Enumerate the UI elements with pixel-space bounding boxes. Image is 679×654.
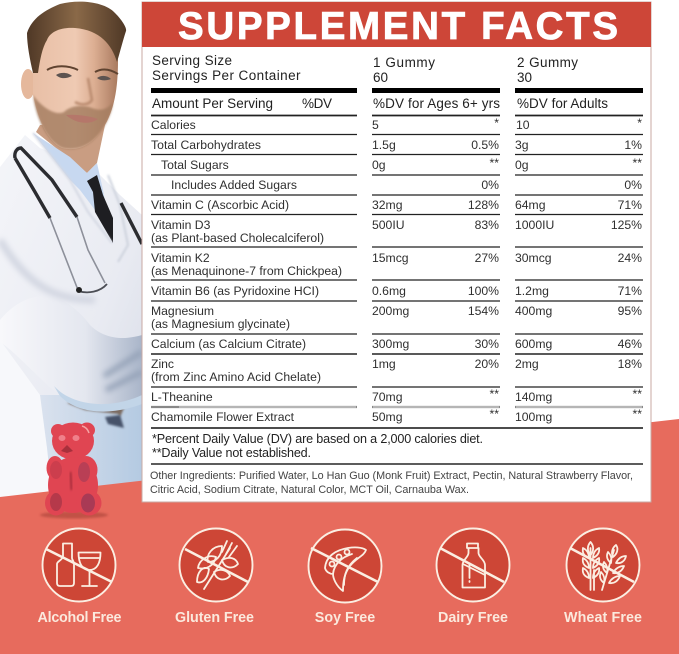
table row: total sugars: **: [632, 156, 642, 170]
table row: vitamin k2: 27%: [475, 251, 499, 265]
table row: zinc: Zinc: [151, 357, 174, 371]
ear: [21, 69, 35, 99]
table row: zinc: (from Zinc Amino Acid Chelate): [151, 370, 321, 384]
table row: l-theanine: **: [632, 387, 642, 401]
lower shirt area: [40, 395, 142, 490]
table row: calories: Calories: [151, 118, 196, 132]
table row: vitamin b6: 1.2mg: [515, 284, 549, 298]
thick rules: [151, 88, 643, 93]
table row: chamomile: 50mg: [372, 410, 402, 424]
column headings: Amount Per Serving: [152, 96, 273, 111]
column headings: %DV for Adults: [517, 96, 608, 111]
table row: vitamin b6: 71%: [618, 284, 642, 298]
serving header: 1 Gummy: [373, 55, 435, 70]
table row: magnesium: 154%: [468, 304, 499, 318]
eyes and brows: [47, 66, 118, 74]
nose and mouth: [75, 78, 92, 104]
column headings: [152, 96, 608, 111]
serving header: [152, 53, 578, 85]
column headings: %DV for Ages 6+ yrs: [373, 96, 500, 111]
title: SUPPLEMENT FACTS: [178, 5, 618, 48]
belt shadow: [67, 395, 130, 417]
table row: calcium: 600mg: [515, 337, 552, 351]
table row: vitamin d3: (as Plant-based Cholecalciferol): [151, 231, 324, 245]
face: [33, 26, 118, 149]
icon: gluten free: [180, 528, 252, 602]
table row: magnesium: 400mg: [515, 304, 552, 318]
table row: chamomile: Chamomile Flower Extract: [151, 410, 295, 424]
table row: zinc: 2mg: [515, 357, 539, 371]
necktie: [87, 175, 113, 243]
table row: magnesium: 200mg: [372, 304, 409, 318]
other ingredients: Other Ingredients: Purified Water, Lo Han Guo (Monk Fruit) Extract, Pectin, Natural Strawberry Flavor,: [150, 470, 633, 482]
table row: vitamin b6: 0.6mg: [372, 284, 406, 298]
table row: total carbohydrates: 1%: [624, 138, 642, 152]
table row: vitamin k2: 15mcg: [372, 251, 409, 265]
table row: magnesium: (as Magnesium glycinate): [151, 317, 290, 331]
table row: calories: *: [494, 116, 499, 130]
serving header: 30: [517, 70, 532, 85]
other ingredients: [150, 470, 633, 496]
table row: chamomile: **: [490, 407, 499, 421]
table row: vitamin k2: 30mcg: [515, 251, 552, 265]
title banner: [142, 2, 651, 47]
coat lapel shading: [33, 133, 112, 243]
table row: calcium: 300mg: [372, 337, 409, 351]
table row: total carbohydrates: 1.5g: [372, 138, 396, 152]
table row: total carbohydrates: 3g: [515, 138, 529, 152]
table row: vitamin c: Vitamin C (Ascorbic Acid): [151, 198, 289, 212]
table row: added sugars: 0%: [481, 178, 499, 192]
panel background: [142, 2, 651, 502]
table row: vitamin k2: Vitamin K2: [151, 251, 210, 265]
table row: calories: 5: [372, 118, 379, 132]
icon: soy free: [308, 530, 382, 602]
table row: zinc: 20%: [475, 357, 499, 371]
footnotes: [152, 432, 483, 460]
gummy bear: [40, 422, 108, 518]
table row: vitamin d3: Vitamin D3: [151, 218, 211, 232]
folded arm sleeve: [0, 296, 142, 407]
table row: zinc: 18%: [618, 357, 642, 371]
table row: total sugars: Total Sugars: [161, 158, 229, 172]
table row: vitamin c: [151, 198, 642, 212]
table row: added sugars: 0%: [624, 178, 642, 192]
table rules: [151, 116, 643, 464]
table row: l-theanine: 140mg: [515, 390, 552, 404]
table row: vitamin b6: 100%: [468, 284, 499, 298]
table row: calcium: Calcium (as Calcium Citrate): [151, 337, 306, 351]
icon: alcohol free: [42, 528, 116, 602]
table row: total sugars: 0g: [372, 158, 386, 172]
serving header: 2 Gummy: [517, 55, 578, 70]
doctor coat: [0, 135, 142, 500]
label: gluten free: Gluten Free: [175, 610, 254, 626]
serving header: Servings Per Container: [152, 68, 301, 83]
hair: [27, 2, 126, 73]
table row: vitamin c: 32mg: [372, 198, 402, 212]
icon: dairy free: [436, 528, 510, 602]
table row: l-theanine: L-Theanine: [151, 390, 213, 404]
label: wheat free: Wheat Free: [564, 610, 642, 626]
table row: vitamin d3: 83%: [475, 218, 499, 232]
table row: l-theanine: [151, 387, 642, 404]
beard: [33, 95, 113, 149]
table row: vitamin k2: [151, 251, 642, 278]
blue shirt collar: [33, 133, 112, 240]
table row: vitamin c: 128%: [468, 198, 499, 212]
footnotes: **Daily Value not established.: [152, 446, 311, 460]
serving header: 60: [373, 70, 388, 85]
table row: zinc: [151, 357, 642, 384]
table row: vitamin d3: 1000IU: [515, 218, 554, 232]
table row: calcium: 46%: [618, 337, 642, 351]
table row: magnesium: 95%: [618, 304, 642, 318]
table row: calcium: [151, 337, 642, 351]
label: dairy free: Dairy Free: [438, 610, 508, 626]
footnotes: *Percent Daily Value (DV) are based on a 2,000 calories diet.: [152, 432, 483, 446]
table row: vitamin b6: Vitamin B6 (as Pyridoxine HCI): [151, 284, 319, 298]
neck: [36, 125, 105, 173]
salmon lower background: [0, 419, 679, 654]
table row: vitamin c: 71%: [618, 198, 642, 212]
table row: total sugars: **: [490, 156, 499, 170]
table row: vitamin d3: [151, 218, 642, 245]
table row: vitamin d3: 125%: [611, 218, 642, 232]
table row: l-theanine: **: [490, 387, 499, 401]
photo: doctor: [0, 2, 142, 500]
table row: vitamin c: 64mg: [515, 198, 546, 212]
label: alcohol free: Alcohol Free: [38, 610, 122, 626]
table row: vitamin k2: (as Menaquinone-7 from Chickpea): [151, 264, 342, 278]
table row: calories: [151, 116, 642, 132]
table row: added sugars: Includes Added Sugars: [171, 178, 297, 192]
table row: chamomile: 100mg: [515, 410, 552, 424]
table row: l-theanine: 70mg: [372, 390, 402, 404]
lower coat area: [0, 340, 52, 500]
stethoscope: [15, 148, 142, 293]
other ingredients: Citric Acid, Sodium Citrate, Natural Color, MCT Oil, Carnauba Wax.: [150, 484, 469, 496]
table row: calories: *: [637, 116, 642, 130]
table row: total carbohydrates: 0.5%: [471, 138, 499, 152]
icon: wheat free: [566, 528, 640, 602]
table row: total sugars: [161, 156, 642, 172]
table row: vitamin b6: [151, 284, 642, 298]
table row: total carbohydrates: [151, 138, 642, 152]
table row: vitamin d3: 500IU: [372, 218, 405, 232]
label: soy free: Soy Free: [315, 610, 375, 626]
table row: added sugars: [171, 178, 642, 192]
table row: chamomile: [151, 407, 642, 424]
table row: vitamin k2: 24%: [618, 251, 642, 265]
table row: chamomile: **: [632, 407, 642, 421]
table row: total carbohydrates: Total Carbohydrates: [151, 138, 261, 152]
table row: magnesium: [151, 304, 642, 331]
table row: total sugars: 0g: [515, 158, 529, 172]
table row: magnesium: Magnesium: [151, 304, 214, 318]
table row: calcium: 30%: [475, 337, 499, 351]
panel: supplement facts: [142, 2, 651, 502]
serving header: Serving Size: [152, 53, 232, 68]
table row: calories: 10: [516, 118, 530, 132]
column headings: %DV: [302, 96, 332, 111]
table row: zinc: 1mg: [372, 357, 396, 371]
